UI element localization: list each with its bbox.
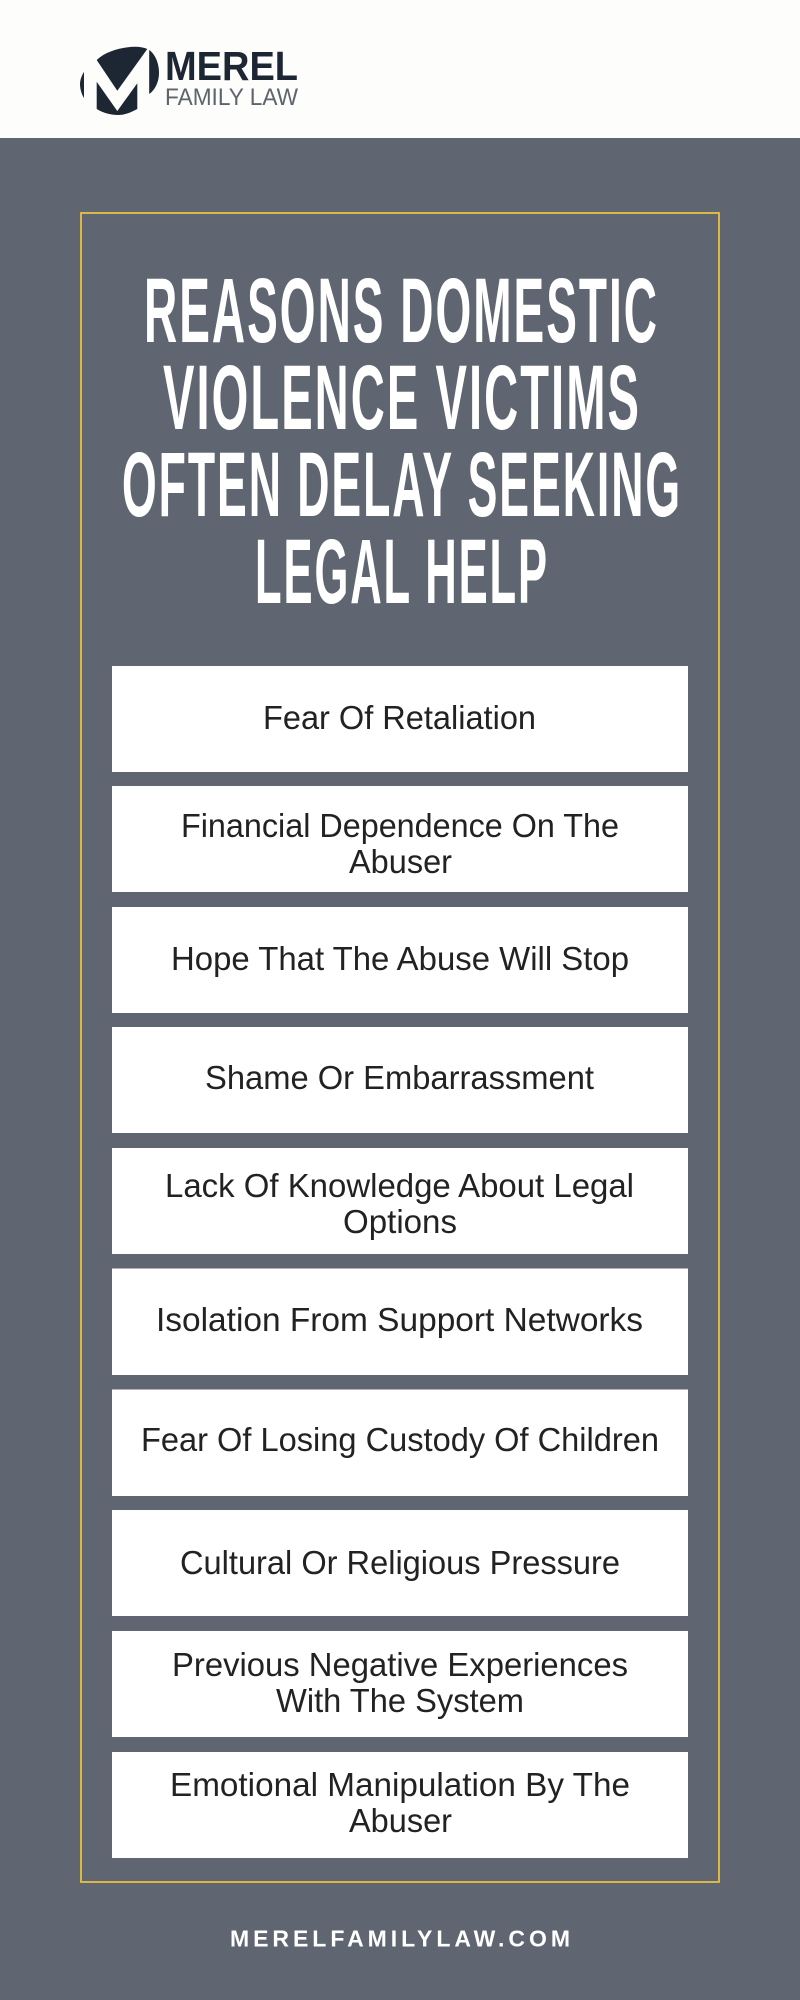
card: shame or embarrassment <box>112 1027 688 1133</box>
title <box>122 260 682 623</box>
card: previous negative experiences: Previous Negative Experiences <box>172 1647 628 1684</box>
card: hope the abuse will stop: Hope That The Abuse Will Stop <box>171 941 629 978</box>
card: isolation: Isolation From Support Networks <box>156 1302 643 1339</box>
card: emotional manipulation: Abuser <box>349 1803 452 1840</box>
card: fear of losing custody: Fear Of Losing Custody Of Children <box>141 1422 659 1459</box>
logo wordmark: MEREL <box>165 43 298 89</box>
card: lack of knowledge: Options <box>343 1204 457 1241</box>
card: cultural or religious pressure <box>112 1510 688 1616</box>
card: cultural or religious pressure: Cultural Or Religious Pressure <box>180 1545 620 1582</box>
gold frame <box>81 213 719 1882</box>
card: previous negative experiences: With The System <box>276 1683 524 1720</box>
card: financial dependence: Financial Dependence On The <box>181 808 619 845</box>
card: fear of retaliation <box>112 666 688 772</box>
card: financial dependence: Abuser <box>349 844 452 881</box>
card: isolation <box>112 1268 688 1375</box>
card: emotional manipulation <box>112 1752 688 1858</box>
card: emotional manipulation: Emotional Manipulation By The <box>170 1767 630 1804</box>
header band <box>0 0 800 138</box>
card: previous negative experiences <box>112 1631 688 1737</box>
footer website: MERELFAMILYLAW.COM <box>230 1926 570 1952</box>
card: fear of losing custody <box>112 1390 688 1496</box>
logo tagline: FAMILY LAW <box>165 84 299 111</box>
card: financial dependence <box>112 786 688 892</box>
logo: Merel Family Law <box>80 43 299 115</box>
card: lack of knowledge: Lack Of Knowledge About Legal <box>165 1168 634 1205</box>
card: fear of retaliation: Fear Of Retaliation <box>263 700 536 737</box>
card: lack of knowledge <box>112 1148 688 1254</box>
icon: M monogram <box>80 47 159 115</box>
card: shame or embarrassment: Shame Or Embarrassment <box>205 1060 595 1097</box>
card: hope the abuse will stop <box>112 907 688 1013</box>
